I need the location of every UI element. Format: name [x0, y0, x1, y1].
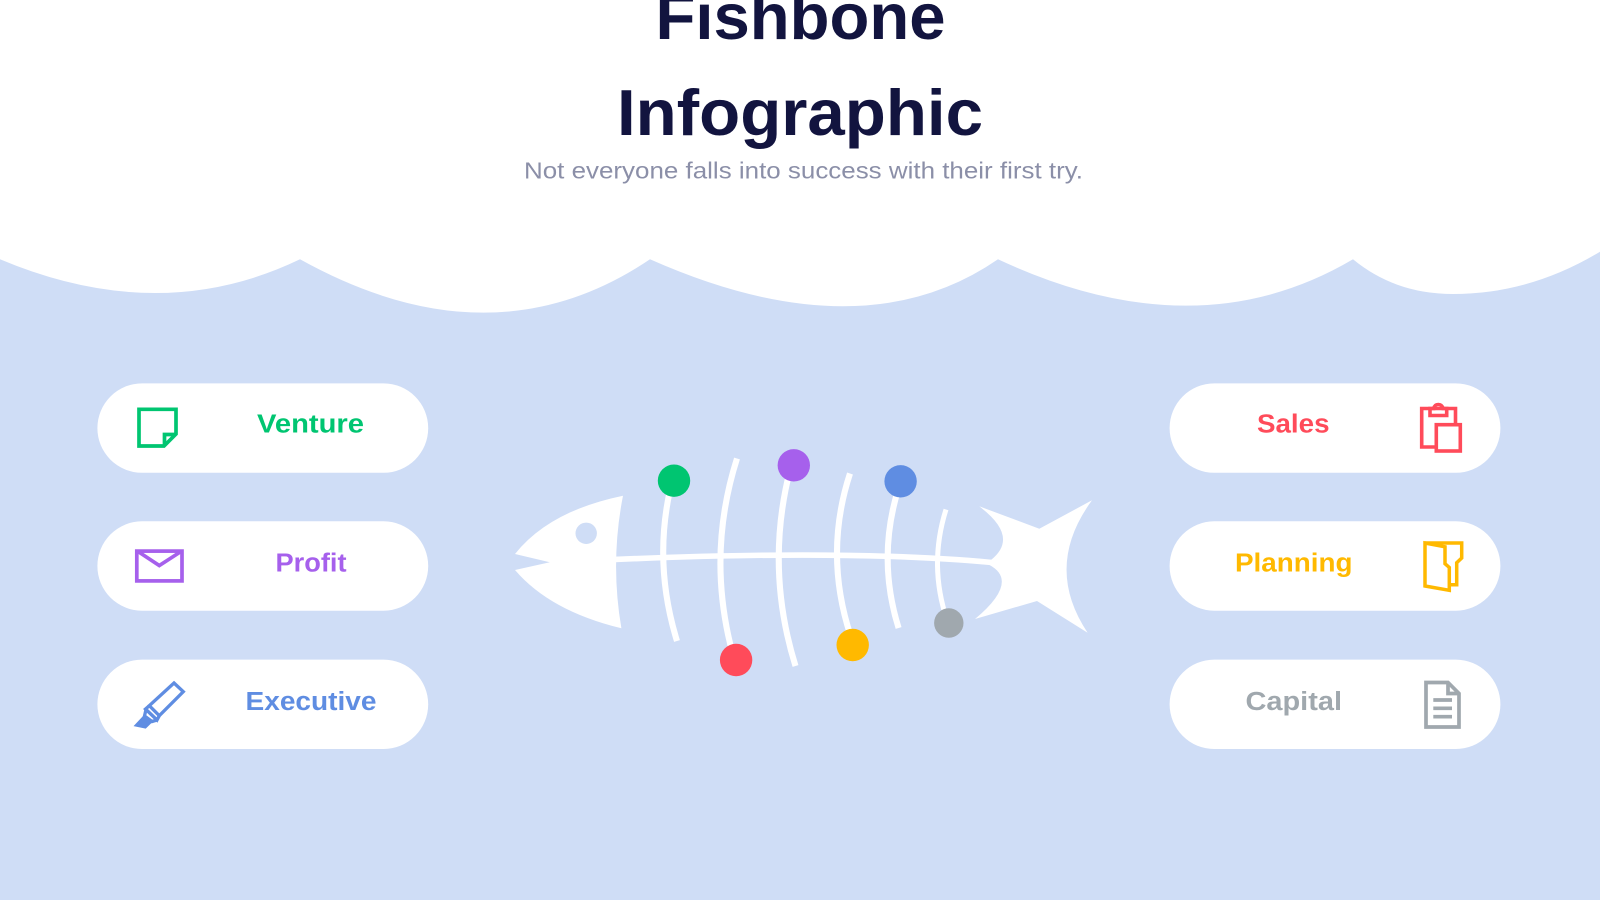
label: Sales	[1257, 411, 1330, 439]
panel: Sales	[1170, 383, 1500, 473]
pill	[97, 383, 428, 473]
icon: sticky note	[139, 409, 176, 446]
icon: highlighter	[135, 683, 183, 728]
label: Profit	[276, 550, 347, 578]
pill	[1170, 660, 1500, 749]
fish spine	[612, 555, 992, 562]
fish tail	[975, 500, 1092, 633]
node: purple	[778, 449, 810, 481]
node: blue	[884, 465, 917, 497]
pill	[1170, 383, 1500, 473]
node: green	[658, 464, 690, 497]
icon: document	[1426, 682, 1459, 727]
label: Executive	[246, 688, 376, 716]
panel: Planning	[1170, 521, 1500, 611]
icon: folder	[1425, 543, 1462, 590]
title: Infographic	[617, 77, 983, 149]
node: red	[720, 644, 752, 676]
pill	[1170, 521, 1500, 611]
fish head	[515, 496, 623, 628]
fish eye	[576, 523, 597, 544]
subtitle: Not everyone falls into success with their first try.	[524, 157, 1083, 183]
node: gray	[934, 608, 964, 638]
icon: clipboards	[1422, 404, 1460, 451]
title	[617, 0, 983, 149]
fish ribs	[663, 458, 947, 666]
wave background	[0, 252, 1600, 900]
panel: Profit	[97, 521, 428, 611]
pill	[97, 521, 428, 611]
panel: Capital	[1170, 660, 1500, 749]
panel: Venture	[97, 383, 428, 473]
pill	[97, 660, 428, 749]
node: yellow	[836, 629, 869, 661]
icon: envelope	[137, 551, 182, 581]
label: Planning	[1235, 550, 1352, 578]
label: Capital	[1246, 688, 1342, 716]
fishbone diagram	[515, 449, 1092, 676]
label: Venture	[257, 411, 364, 439]
panel: Executive	[97, 660, 428, 749]
